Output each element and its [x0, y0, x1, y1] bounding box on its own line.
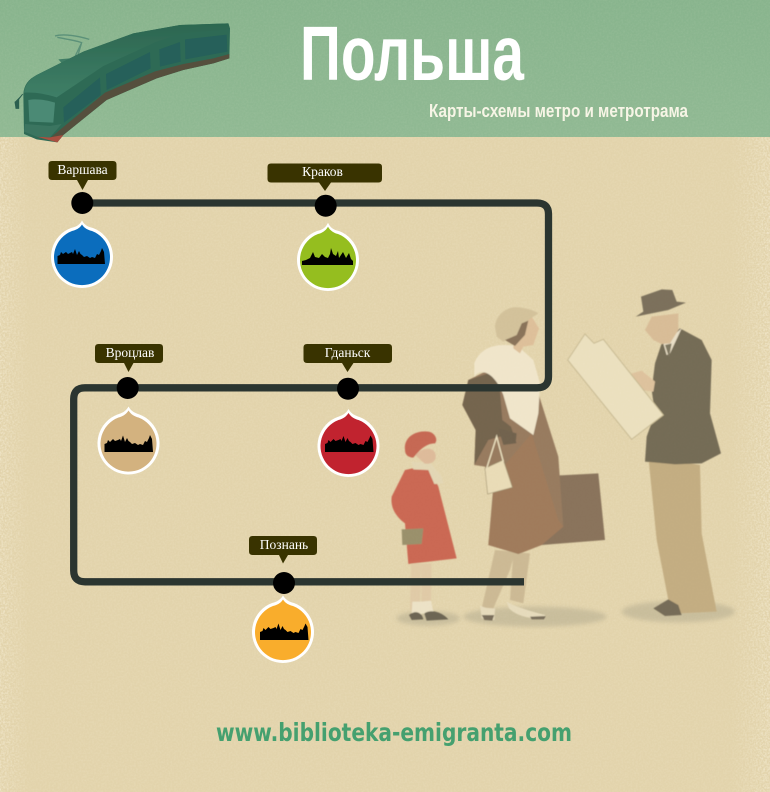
- jacket: [645, 328, 721, 464]
- illustration: emigrant family: [391, 289, 735, 627]
- hand: [627, 371, 655, 392]
- icon: red drop with skyline: [318, 409, 380, 477]
- website url: www.biblioteka-emigranta.com: [216, 718, 572, 747]
- face and hat: [513, 317, 539, 353]
- ground shadows: [397, 601, 735, 627]
- woman: [462, 307, 563, 621]
- newspaper: [568, 334, 663, 439]
- icon: green tram: [15, 23, 230, 142]
- label: Гданьск: Гданьск: [325, 345, 371, 360]
- tram pantograph: [55, 35, 89, 59]
- icon: blue drop with skyline: [51, 220, 113, 288]
- label: Краков: Краков: [302, 164, 343, 179]
- coat: [462, 363, 563, 554]
- trousers: [648, 457, 717, 613]
- label: Познань: Познань: [260, 537, 308, 552]
- subtitle: Карты-схемы метро и метротрама: [429, 101, 689, 121]
- icon: tan drop with skyline: [97, 406, 159, 474]
- station dot: [315, 195, 337, 217]
- station: Краков: [268, 164, 382, 291]
- icon: green drop with skyline: [297, 223, 359, 291]
- tram lower red skirt: [50, 54, 229, 142]
- panel: green header band: [0, 0, 770, 137]
- station: Гданьск: [304, 344, 392, 477]
- shirt and tie: [663, 328, 682, 355]
- station: Вроцлав: [95, 344, 163, 474]
- girl: [391, 431, 457, 621]
- tram roof: [24, 23, 230, 97]
- tram body: [23, 23, 230, 142]
- label: Вроцлав: Вроцлав: [106, 345, 154, 360]
- station: Познань: [249, 536, 317, 663]
- hat: [636, 289, 686, 317]
- station: Варшава: [48, 161, 116, 288]
- label: Варшава: Варшава: [57, 162, 108, 177]
- suitcase: [542, 473, 605, 545]
- tram windows: [63, 35, 227, 123]
- legs: [482, 550, 530, 608]
- station dot: [117, 377, 139, 399]
- tram front windscreen: [28, 99, 55, 123]
- scarf: [474, 345, 540, 435]
- head: [645, 313, 678, 344]
- metro line: [74, 203, 548, 582]
- handbag: [485, 460, 512, 494]
- station dot: [71, 192, 93, 214]
- shoes: [653, 599, 682, 616]
- man: [568, 289, 721, 616]
- icon: orange drop with skyline: [252, 596, 314, 663]
- title: Польша: [300, 11, 525, 97]
- station dot: [337, 378, 359, 400]
- station dot: [273, 572, 295, 594]
